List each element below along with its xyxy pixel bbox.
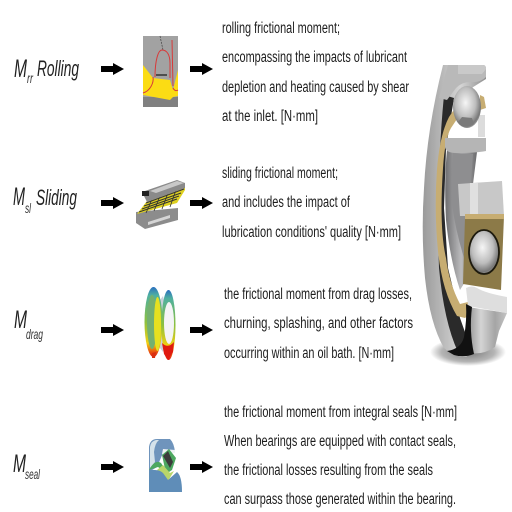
text: rolling description: rolling frictional moment; <box>222 20 340 37</box>
text: seal description <box>224 404 457 508</box>
arrow: rolling to icon <box>101 63 124 75</box>
row 1 label: Mrr Rolling: rr <box>27 70 34 86</box>
row 1 label: Mrr Rolling: Rolling <box>37 56 79 81</box>
row 3 label: Mdrag: drag <box>26 326 43 342</box>
row 1 label: Mrr Rolling: M <box>14 55 27 83</box>
row 4 label: Mseal <box>13 450 41 482</box>
lower ball <box>469 230 499 274</box>
arrow: drag to text <box>190 324 213 336</box>
illustration: cutaway ball bearing <box>423 65 507 366</box>
text: seal description: the frictional losses resulting from the seals <box>224 462 433 479</box>
inner raceway <box>445 150 477 290</box>
outer ring silhouette <box>423 65 486 357</box>
arrow: rolling to text <box>190 63 213 75</box>
arrow: seal to icon <box>101 461 124 473</box>
text: drag description <box>224 286 413 362</box>
row 4 label: Mseal: M <box>13 450 26 478</box>
row 2 label: Msl Sliding <box>13 183 77 216</box>
text: sliding description <box>222 165 401 241</box>
text: rolling description: encompassing the impacts of lubricant <box>222 49 407 66</box>
text: rolling description <box>222 20 409 125</box>
arrow: drag to icon <box>101 324 124 336</box>
top ring section <box>439 65 486 100</box>
text: sliding description: lubrication conditions' quality [N·mm] <box>222 224 401 241</box>
icon: rolling contact <box>143 36 178 107</box>
row 2 label: Msl Sliding: sl <box>25 200 32 216</box>
text: drag description: occurring within an oil bath. [N·mm] <box>224 345 394 362</box>
row 4 label: Mseal: seal <box>25 466 41 482</box>
row 2 label: Msl Sliding: M <box>13 183 25 211</box>
top ball <box>453 86 481 128</box>
icon: integral seal <box>149 439 182 492</box>
right race edge <box>478 115 485 137</box>
lower housing <box>458 181 504 216</box>
text: drag description: churning, splashing, and other factors <box>224 315 413 332</box>
arrow: sliding to icon <box>101 197 124 209</box>
section below top ball <box>445 138 486 153</box>
row 1 label: Mrr Rolling <box>14 55 79 86</box>
row 3 label: Mdrag: M <box>14 306 27 334</box>
text: sliding description: and includes the impact of <box>222 194 350 211</box>
text: sliding description: sliding frictional moment; <box>222 165 338 182</box>
arrow: seal to text <box>190 461 213 473</box>
brass block <box>463 216 504 290</box>
dark band <box>438 95 472 352</box>
arrow: sliding to text <box>190 197 213 209</box>
text: rolling description: at the inlet. [N·mm] <box>222 108 318 125</box>
brass cage <box>436 111 470 318</box>
icon: sliding contact block <box>136 180 185 229</box>
row 2 label: Msl Sliding: Sliding <box>36 185 77 210</box>
text: rolling description: depletion and heating caused by shear <box>222 79 409 96</box>
text: drag description: the frictional moment from drag losses, <box>224 286 412 303</box>
lower inner ring <box>467 307 507 353</box>
icon: drag CFD bearing <box>144 287 176 360</box>
row 3 label: Mdrag <box>14 306 43 342</box>
